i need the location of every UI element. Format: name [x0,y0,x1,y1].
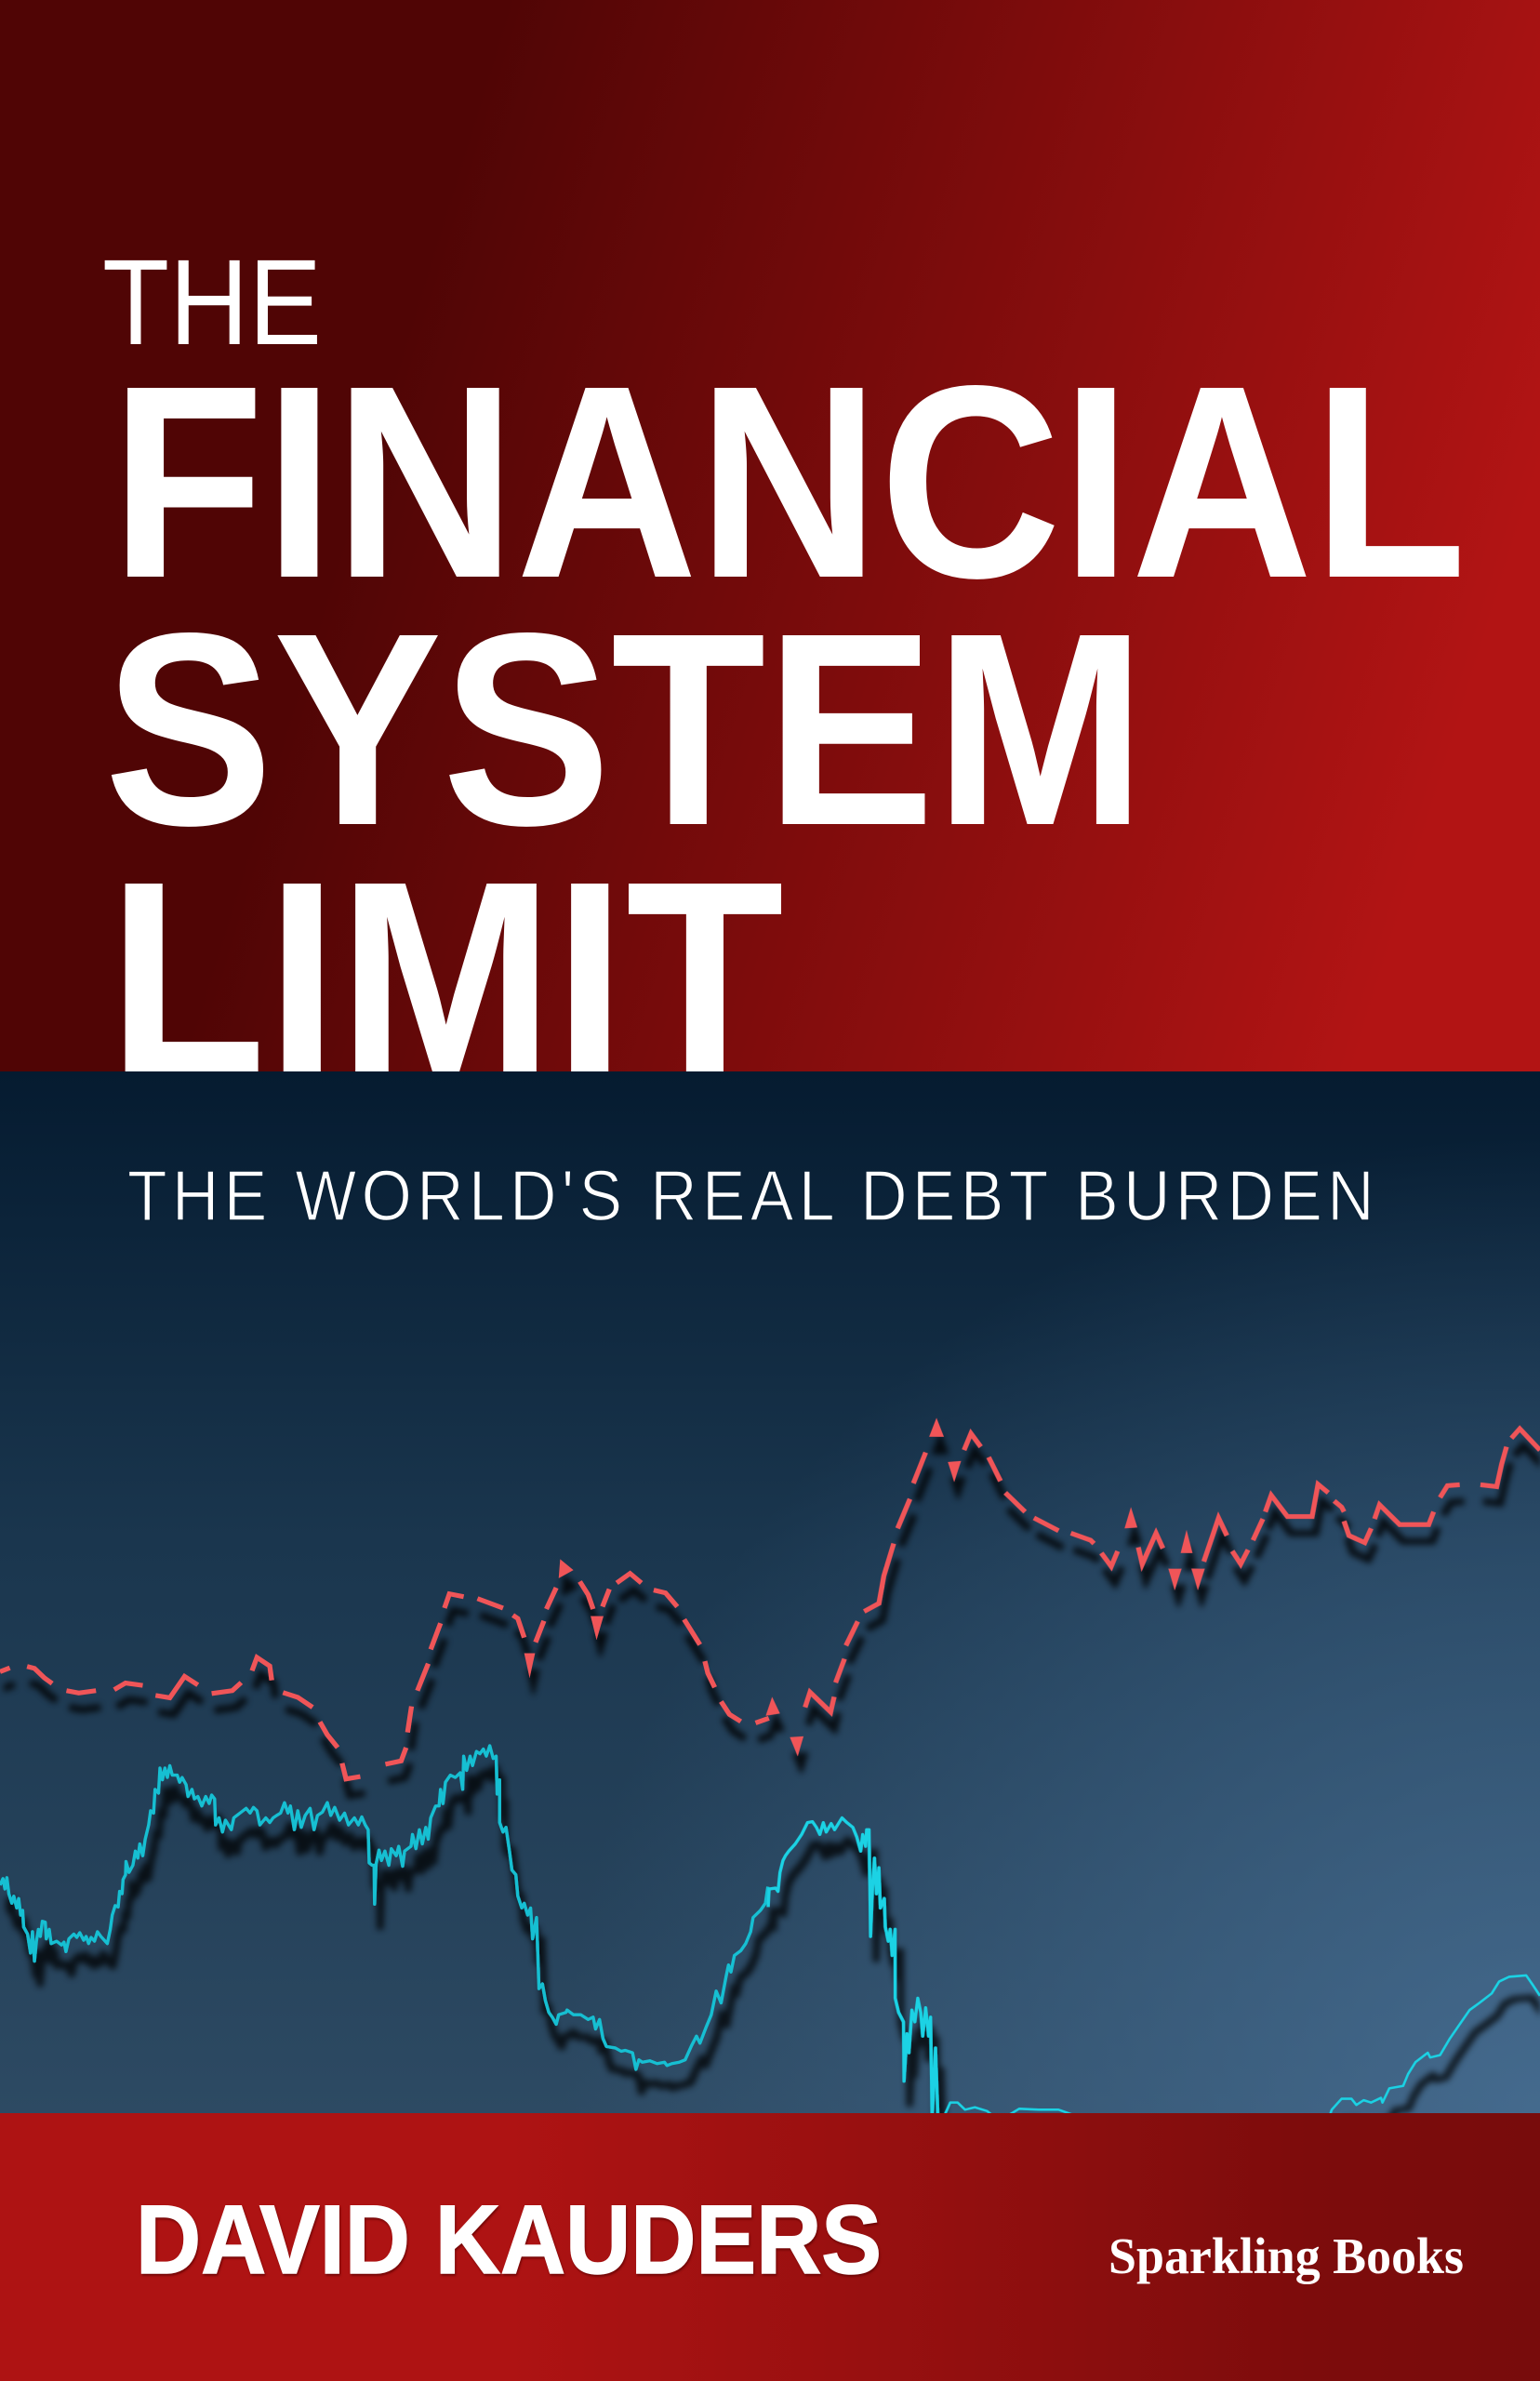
title: SYSTEM: SYSTEM [104,576,1146,883]
panel: blue chart band [0,1071,1540,2113]
chart: cyan line [0,1746,1540,2119]
chart: red dashed line [0,1417,1540,1779]
author name: DAVID KAUDERS [136,2186,882,2295]
publisher name: Sparkling Books [1109,2228,1464,2284]
title: LIMIT: LIMIT [108,824,784,1131]
subtitle: THE WORLD'S REAL DEBT BURDEN [127,1156,1379,1236]
panel: red title band [0,0,1540,1071]
title: THE: THE [102,233,322,370]
panel: red author band [0,2113,1540,2381]
